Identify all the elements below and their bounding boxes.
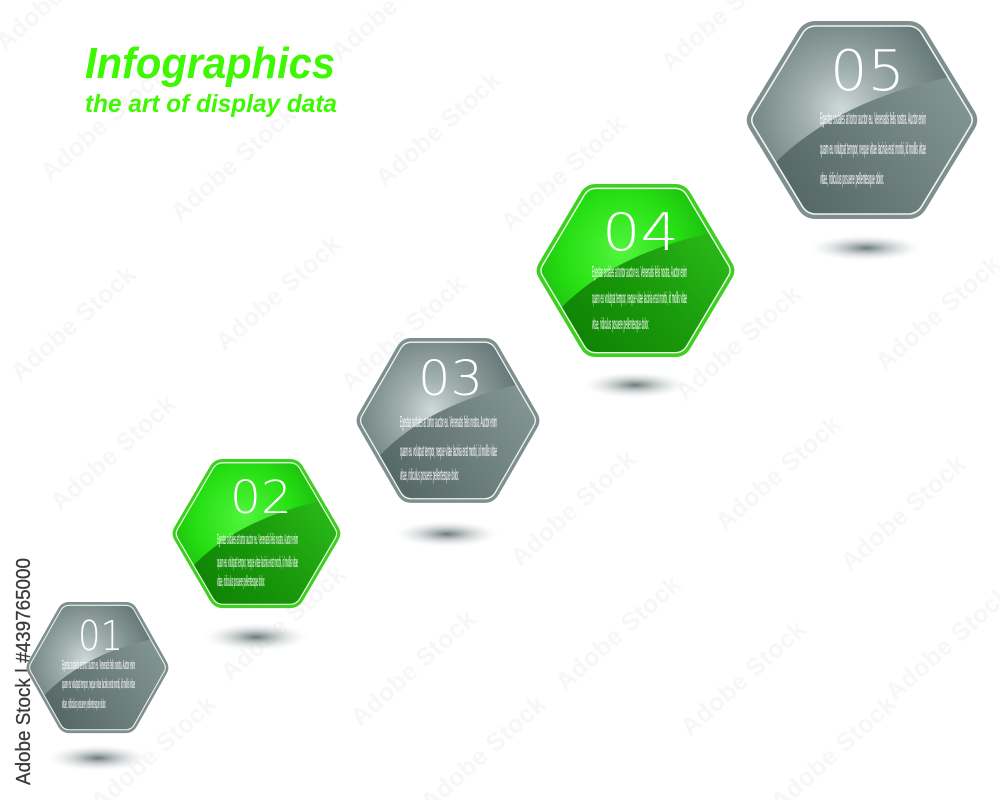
watermark pattern: Adobe Stock	[5, 260, 142, 386]
body text 01	[62, 657, 135, 711]
watermark pattern: Adobe Stock	[835, 450, 972, 576]
text: vitae, ridiculus posuere pellentesque dolor.	[62, 696, 106, 711]
panel: step 02	[172, 459, 347, 604]
text: quam eu volutpat tempor, neque vitae lacinia erat morbi, id mollis vitae	[217, 554, 298, 571]
number 05: 05	[830, 39, 905, 104]
text: quam eu volutpat tempor, neque vitae lacinia erat morbi, id mollis vitae	[62, 676, 135, 691]
panel: step 01	[26, 602, 174, 730]
shadow 01	[48, 745, 148, 771]
watermark pattern: Adobe Stock	[35, 60, 172, 186]
watermark pattern: Adobe Stock	[45, 390, 182, 516]
stock credit vertical text: Adobe Stock | #439765000	[13, 558, 35, 785]
body text 03	[400, 414, 497, 484]
shadow 02	[204, 623, 308, 651]
text: vitae, ridiculus posuere pellentesque dolor.	[592, 316, 649, 333]
panel: step 05	[746, 21, 986, 214]
shadow 05	[810, 235, 922, 261]
subheading: the art of display data	[85, 90, 337, 118]
watermark pattern: Adobe Stock	[550, 570, 687, 696]
watermark pattern: Adobe Stock	[495, 110, 632, 236]
body text 02	[217, 531, 298, 590]
number 04: 04	[602, 203, 679, 263]
watermark pattern: Adobe Stock	[370, 66, 507, 192]
text: Egestas sodales at tortor auctor eu. Venenatis felis nostra. Auctor enim	[400, 414, 497, 431]
watermark pattern: Adobe Stock	[165, 100, 302, 226]
shadow 03	[395, 521, 499, 547]
number 02: 02	[230, 471, 292, 524]
text: Egestas sodales at tortor auctor eu. Venenatis felis nostra. Auctor enim	[62, 657, 135, 672]
watermark pattern: Adobe Stock	[345, 605, 482, 731]
watermark pattern: Adobe Stock	[675, 615, 812, 741]
panel: step 04	[536, 184, 742, 353]
text: vitae, ridiculus posuere pellentesque dolor.	[217, 573, 265, 590]
shadow 04	[583, 372, 687, 398]
body text 05	[820, 109, 926, 188]
watermark pattern: Adobe Stock	[210, 230, 347, 356]
panel: step 03	[356, 338, 546, 499]
watermark pattern: Adobe Stock	[335, 270, 472, 396]
body text 04	[592, 264, 687, 333]
text: quam eu volutpat tempor, neque vitae lacinia erat morbi, id mollis vitae	[400, 443, 497, 460]
watermark pattern: Adobe Stock	[710, 410, 847, 536]
text: vitae, ridiculus posuere pellentesque dolor.	[400, 467, 459, 484]
number 01: 01	[78, 612, 123, 660]
number 03: 03	[418, 351, 483, 407]
text: Egestas sodales at tortor auctor eu. Venenatis felis nostra. Auctor enim	[217, 531, 298, 548]
heading: Infographics: Infographics	[85, 39, 335, 88]
watermark pattern: Adobe Stock	[215, 560, 352, 686]
title	[85, 39, 337, 118]
watermark pattern: Adobe Stock	[505, 445, 642, 571]
watermark pattern: Adobe Stock	[670, 280, 807, 406]
